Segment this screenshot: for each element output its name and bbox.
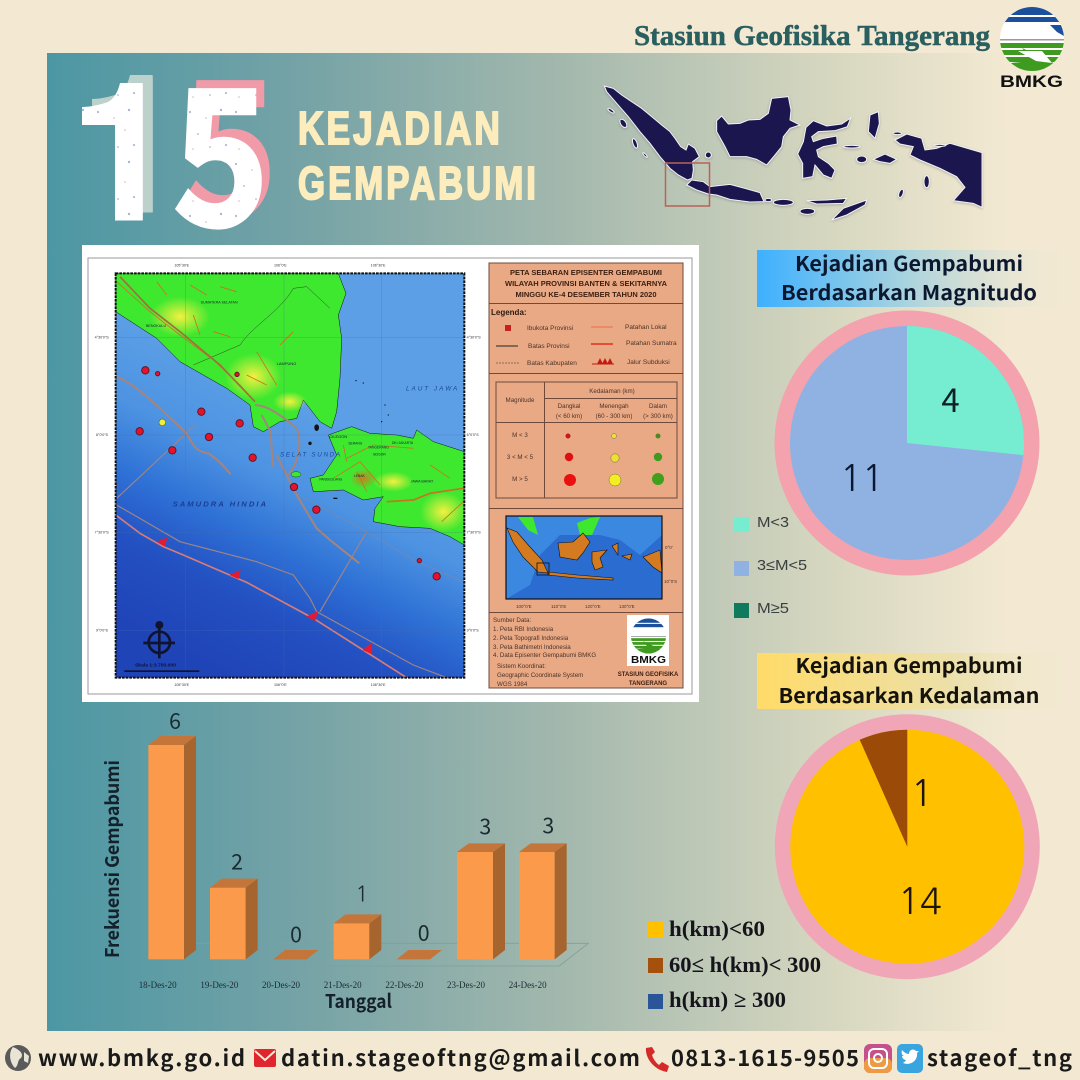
icon: small BMKG logo <box>627 615 669 666</box>
pie chart: magnitude <box>774 310 1040 576</box>
map: epicentre map: JAWA BARAT <box>411 480 434 484</box>
phone: 0813-1615-9505 <box>671 1041 859 1073</box>
bar value labels: 3 <box>542 809 554 840</box>
panel: magnitude pie <box>734 247 1077 618</box>
bar value labels <box>169 705 554 949</box>
map: Indonesia silhouette <box>604 86 982 220</box>
map: epicentre map: TANGERANG <box>368 445 389 449</box>
map symbol legend: Ibukota Provinsi <box>527 325 573 332</box>
bar value labels: 1 <box>356 884 368 905</box>
big number 15: 5 <box>181 0 277 271</box>
depth-magnitude table: Dalam <box>649 403 667 410</box>
map: epicentre map: LAUT JAWA <box>406 386 459 393</box>
axis title: Frekuensi Gempabumi: Frekuensi Gempabumi <box>98 760 125 958</box>
legend: magnitude: M<3 <box>757 514 789 531</box>
icon: instagram <box>864 1044 892 1073</box>
inset map: 130°0'E <box>619 604 635 609</box>
icon: twitter <box>897 1044 923 1073</box>
icon: globe <box>5 1045 31 1071</box>
big number 15 <box>82 75 270 230</box>
bar: 23-Des-20 <box>457 843 505 959</box>
icon: BMKG logo <box>1000 7 1064 91</box>
map title: MINGGU KE-4 DESEMBER TAHUN 2020 <box>516 290 656 299</box>
axis title: Tanggal: Tanggal <box>325 987 392 1014</box>
heading: depth <box>757 649 1077 709</box>
map: epicentre map: LEBAK <box>354 474 366 478</box>
big number 15: 5 <box>173 8 269 279</box>
panel: map legend <box>489 263 683 688</box>
bar: 24-Des-20 <box>519 843 567 959</box>
chart floor <box>196 943 588 966</box>
depth-magnitude table: (> 300 km) <box>643 413 673 420</box>
pie chart: magnitude: 11 <box>840 461 884 497</box>
data sources: 1. Peta RBI Indonesia <box>493 626 554 633</box>
map: epicentre map: 105°30'E <box>174 264 190 268</box>
map: epicentre map: 106°30'E <box>371 683 386 687</box>
map: epicentre map: Skala 1:3.700.000 <box>135 663 176 669</box>
map: epicentre map: 7°30'0"S <box>467 531 481 535</box>
chart: 3D bar chart of frequency per date <box>98 705 588 1014</box>
email: datin.stageoftng@gmail.com <box>281 1041 640 1073</box>
legend: magnitude <box>734 514 807 618</box>
map symbol legend: Patahan Sumatra <box>626 340 677 347</box>
bar: 22-Des-20 <box>397 950 442 959</box>
bar value labels: 2 <box>231 845 243 876</box>
website: www.bmkg.go.id <box>38 1041 245 1073</box>
heading: kejadian gempabumi: GEMPABUMI <box>298 157 539 209</box>
inset map: 0°0' <box>665 545 673 550</box>
depth-magnitude table: Kedalaman (km) <box>589 388 635 395</box>
depth-magnitude table: (< 60 km) <box>556 413 582 420</box>
map: epicentre map: SAMUDRA HINDIA <box>173 499 268 508</box>
map: epicentre map: 106°30'E <box>371 264 386 268</box>
data sources: WGS 1984 <box>497 681 528 688</box>
icon: phone <box>646 1047 669 1072</box>
pie chart: depth: 1 <box>911 776 933 812</box>
map: epicentre map: 4°30'0"S <box>95 335 109 339</box>
bar: 21-Des-20 <box>334 914 381 959</box>
panel: earthquake epicentre map sheet <box>82 245 699 702</box>
inset map: 100°0'E <box>516 604 532 609</box>
map: epicentre map: 106°0'E <box>274 264 287 268</box>
data sources: Geographic Coordinate System <box>497 672 583 679</box>
date axis labels: 22-Des-20 <box>385 980 424 990</box>
map: epicentre map: LAMPUNG <box>277 361 296 366</box>
depth-magnitude table: Menengah <box>599 403 629 410</box>
depth-magnitude table: M > 5 <box>512 476 528 483</box>
icon: north arrow <box>143 622 175 658</box>
inset map: 10°0'S <box>664 579 677 584</box>
bar value labels: 0 <box>418 917 430 948</box>
inset map <box>506 516 677 609</box>
map symbol legend: Legenda: <box>491 308 527 317</box>
heading: depth: Kejadian Gempabumi <box>796 649 1022 679</box>
legend: depth <box>648 916 821 1012</box>
date axis labels: 23-Des-20 <box>447 980 485 990</box>
bar: 20-Des-20 <box>273 950 318 959</box>
map: epicentre map: PANDEGLANG <box>319 477 343 481</box>
map title: PETA SEBARAN EPISENTER GEMPABUMI <box>510 268 662 277</box>
data sources <box>493 617 596 688</box>
map: epicentre map: CILEGON <box>329 434 347 439</box>
map symbol legend: Batas Kabupaten <box>527 360 577 367</box>
icon: BMKG logo: BMKG <box>1000 72 1063 91</box>
date axis labels: 18-Des-20 <box>139 980 177 990</box>
date axis labels: 20-Des-20 <box>262 980 300 990</box>
data sources: Sistem Koordinat: <box>497 663 546 670</box>
bar value labels: 3 <box>479 810 491 841</box>
depth-magnitude table: Magnitude <box>506 397 535 404</box>
heading: kejadian gempabumi: KEJADIAN <box>298 102 503 154</box>
data sources: 4. Data Episenter Gempabumi BMKG <box>493 652 596 659</box>
depth-magnitude table <box>496 382 677 498</box>
bar: 18-Des-20 <box>148 736 196 959</box>
big number 15: 1 <box>81 0 191 266</box>
legend: depth: h(km)<60 <box>669 916 765 941</box>
map title: WILAYAH PROVINSI BANTEN & SEKITARNYA <box>505 279 668 288</box>
map: epicentre map: 105°30'E <box>174 683 190 687</box>
heading: magnitude: Kejadian Gempabumi <box>795 247 1023 277</box>
big number 15: 1 <box>71 3 181 274</box>
bar: 19-Des-20 <box>210 879 258 959</box>
date axis labels <box>139 980 547 990</box>
pie chart: magnitude: 4 <box>941 374 960 422</box>
map: epicentre map: DKI JAKARTA <box>392 441 414 445</box>
legend: magnitude: M≥5 <box>757 600 789 617</box>
pie chart: depth: 14 <box>898 884 942 920</box>
data sources: Sumber Data: <box>493 617 531 624</box>
map: epicentre map: BENGKULU <box>146 324 166 328</box>
station name header: Stasiun Geofisika Tangerang <box>634 21 990 52</box>
heading: magnitude: Berdasarkan Magnitudo <box>781 276 1037 306</box>
map: epicentre map: SELAT SUNDA <box>280 452 342 459</box>
depth-magnitude table: M < 3 <box>512 432 528 439</box>
bar value labels: 6 <box>169 705 181 736</box>
legend: depth: h(km) ≥ 300 <box>669 987 786 1012</box>
pie chart: depth <box>775 714 1040 979</box>
social handle: stageof_tng <box>927 1041 1072 1073</box>
map: epicentre map <box>95 264 481 687</box>
icon: small BMKG logo: BMKG <box>631 655 666 666</box>
map: epicentre map: SUMATERA SELATAN <box>201 301 238 305</box>
map symbol legend: Patahan Lokal <box>625 324 667 331</box>
icon: mail <box>254 1049 276 1067</box>
station stamp <box>618 672 679 687</box>
bar value labels: 0 <box>290 918 302 949</box>
date axis labels: 21-Des-20 <box>324 980 362 990</box>
data sources: 2. Peta Topografi Indonesia <box>493 635 569 642</box>
legend: magnitude: 3≤M<5 <box>757 557 807 574</box>
map: epicentre map: 9°0'0"S <box>467 629 479 633</box>
map: epicentre map: 7°30'0"S <box>95 531 109 535</box>
panel: depth pie <box>648 649 1077 1012</box>
map: epicentre map: 106°0'E <box>274 683 287 687</box>
inset map: 110°0'E <box>551 604 566 609</box>
heading: kejadian gempabumi <box>298 102 539 209</box>
map: epicentre map: SERANG <box>348 441 363 445</box>
heading: depth: Berdasarkan Kedalaman <box>778 679 1040 709</box>
inset map: 120°0'E <box>585 604 601 609</box>
map title <box>505 268 668 299</box>
map: epicentre map: 4°30'0"S <box>467 335 481 339</box>
map symbol legend: Jalur Subduksi <box>627 359 670 366</box>
depth-magnitude table: 3 < M < 5 <box>507 454 534 461</box>
station stamp: TANGERANG <box>629 681 667 687</box>
map symbol legend: Batas Provinsi <box>528 343 570 350</box>
depth-magnitude table: Dangkal <box>558 403 580 410</box>
map: epicentre map: BOGOR <box>373 453 386 457</box>
depth-magnitude table: (60 - 300 km) <box>596 413 632 420</box>
heading: magnitude <box>757 247 1077 307</box>
station stamp: STASIUN GEOFISIKA <box>618 672 679 678</box>
legend: depth: 60≤ h(km)< 300 <box>669 952 821 977</box>
map symbol legend <box>491 308 677 367</box>
date axis labels: 19-Des-20 <box>200 980 239 990</box>
date axis labels: 24-Des-20 <box>509 980 547 990</box>
footer: contact bar <box>5 1041 1072 1073</box>
map: epicentre map: 9°0'0"S <box>96 629 109 633</box>
map: epicentre map: 6°0'0"S <box>467 433 479 437</box>
map: epicentre map: 6°0'0"S <box>96 433 109 437</box>
data sources: 3. Peta Bathimetri Indonesia <box>493 644 571 651</box>
